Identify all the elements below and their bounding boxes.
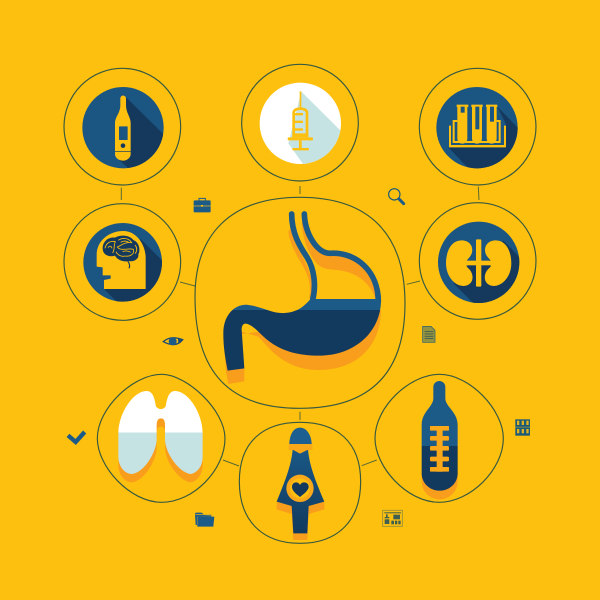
panel: stomach blob bbox=[195, 197, 405, 408]
icon: eye bbox=[163, 337, 183, 345]
icon: test tubes in rack bbox=[449, 105, 506, 147]
icon shadow: lungs bbox=[118, 399, 203, 482]
panel: kidneys circle bbox=[419, 203, 536, 319]
icon: briefcase bbox=[194, 198, 211, 212]
icon shadow: figure bbox=[277, 502, 324, 540]
icon: syringe bbox=[288, 91, 313, 150]
panel: lungs blob bbox=[97, 374, 225, 502]
icon: document bbox=[423, 326, 435, 342]
icon: bottle thermometer bbox=[422, 381, 458, 491]
infographic canvas bbox=[63, 64, 537, 544]
icon shadow: bottle bbox=[422, 473, 458, 499]
panel: brain head circle bbox=[64, 204, 181, 320]
panel: syringe circle bbox=[242, 64, 358, 181]
icon: pregnant figure bbox=[277, 428, 324, 533]
icon: lungs bbox=[118, 391, 203, 474]
icon: head with brain bbox=[97, 231, 146, 289]
icon: check mark bbox=[68, 432, 85, 442]
icon: digital thermometer bbox=[115, 95, 131, 161]
icon: folder bbox=[195, 513, 214, 527]
panel: pregnancy figure blob bbox=[239, 422, 361, 543]
panel: bottle thermometer blob bbox=[375, 374, 503, 502]
panel: test tubes circle bbox=[419, 68, 536, 185]
connector lines bbox=[121, 186, 479, 466]
panel: thermometer circle bbox=[64, 68, 181, 185]
icon: stomach bbox=[223, 214, 381, 371]
icon shadow: stomach bbox=[223, 215, 381, 384]
icon: magnifying glass bbox=[389, 189, 404, 204]
icon: kidneys bbox=[446, 239, 511, 287]
icon: QR label bbox=[383, 510, 402, 526]
icon: binders grid bbox=[515, 419, 530, 436]
